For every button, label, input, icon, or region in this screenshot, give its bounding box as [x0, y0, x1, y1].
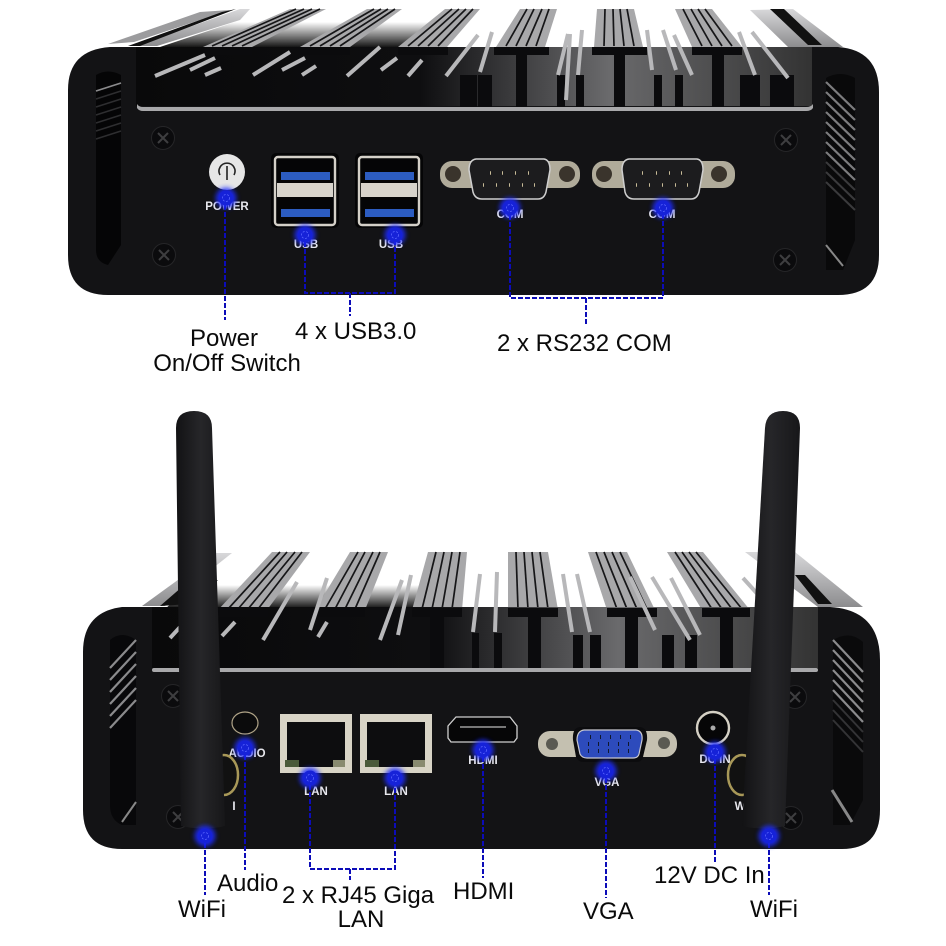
VGA port	[538, 727, 677, 789]
callout: USB3.0	[294, 224, 416, 345]
callout: DC In	[654, 742, 765, 889]
audio jack	[228, 712, 266, 760]
callout: RS232 COM: 2 x RS232 COM	[497, 330, 672, 357]
callout: RS232 COM	[497, 198, 674, 357]
device: bottom view rear panel	[83, 411, 880, 849]
callout: RJ45 LAN: LAN	[338, 906, 384, 933]
device: top view front panel	[68, 9, 879, 295]
callout: DC In: 12V DC In	[654, 862, 765, 889]
WiFi connector left	[210, 755, 238, 813]
callout: USB3.0: 4 x USB3.0	[295, 318, 416, 345]
USB port pair 1: USB	[294, 239, 318, 251]
callout: RJ45 LAN: 2 x RJ45 Giga	[282, 882, 435, 909]
power button	[205, 154, 249, 213]
callout: WiFi left	[178, 826, 226, 923]
WiFi connector right: W	[735, 801, 746, 813]
screws	[162, 684, 806, 830]
USB port pair 2: USB	[379, 239, 403, 251]
HDMI port	[448, 717, 517, 767]
case body	[83, 607, 880, 849]
USB port pair 1	[271, 153, 339, 251]
callout: power switch: Power	[190, 325, 258, 352]
WiFi connector left: I	[232, 801, 236, 813]
WiFi connector right	[728, 755, 756, 813]
audio jack: AUDIO	[228, 748, 266, 760]
right vent	[832, 635, 863, 825]
callout: Audio	[217, 738, 278, 897]
callout: WiFi right	[750, 826, 798, 923]
HDMI port: HDMI	[468, 755, 498, 767]
LAN port 1	[280, 714, 352, 798]
DC power jack	[697, 712, 731, 766]
shadow behind left fins	[157, 22, 440, 48]
heatsink stems and short fins	[170, 572, 790, 668]
fin channel	[136, 47, 812, 106]
callout: power switch	[153, 188, 301, 377]
fin channel	[152, 607, 818, 668]
case body	[68, 47, 879, 295]
COM port 2: COM	[649, 209, 675, 221]
left vent	[110, 635, 136, 825]
left vent	[96, 72, 121, 265]
DC power jack: DC IN	[699, 754, 731, 766]
antenna left	[176, 411, 225, 828]
screws	[152, 126, 798, 272]
top rim line	[152, 668, 818, 672]
right vent	[826, 74, 855, 270]
callout: Audio: Audio	[217, 870, 278, 897]
heatsink fins top row	[108, 9, 843, 47]
LAN port 1: LAN	[304, 786, 328, 798]
callout: WiFi right: WiFi	[750, 896, 798, 923]
antenna right	[742, 411, 800, 828]
LAN port 2: LAN	[384, 786, 408, 798]
power button: POWER	[205, 201, 249, 213]
shadow behind left fins	[165, 585, 430, 609]
callout: power switch: On/Off Switch	[153, 350, 301, 377]
callout: VGA: VGA	[583, 898, 634, 925]
callout: HDMI: HDMI	[453, 878, 514, 905]
USB port pair 2	[355, 153, 423, 251]
callout: HDMI	[453, 740, 514, 905]
COM port 1: COM	[497, 209, 523, 221]
VGA port: VGA	[595, 777, 619, 789]
heatsink stems and short fins	[155, 30, 794, 107]
callout: VGA	[583, 760, 634, 925]
callout: RJ45 LAN	[282, 768, 435, 933]
top rim line	[137, 104, 813, 111]
LAN port 2	[360, 714, 432, 798]
COM port 2	[592, 159, 735, 221]
heatsink fins lower row	[142, 552, 863, 610]
COM port 1	[440, 159, 580, 221]
callout: WiFi left: WiFi	[178, 896, 226, 923]
